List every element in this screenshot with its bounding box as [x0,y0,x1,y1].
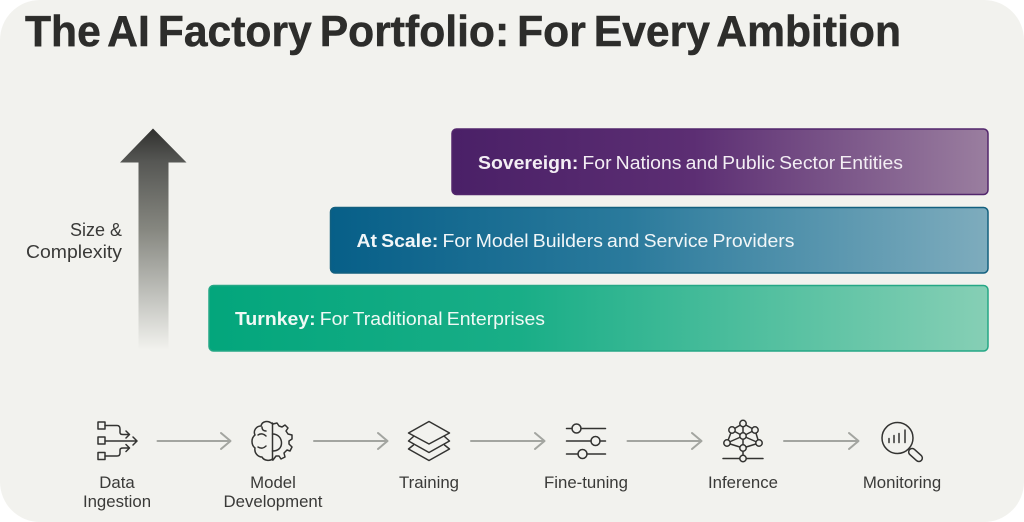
step label: model development [224,473,323,511]
axis label: size and complexity: Size & [70,220,122,240]
tier: Sovereign: Sovereign: For Nations and Public Sector Entities [478,152,903,173]
arrow: ingestion to development [158,433,230,449]
step label: inference: Inference [708,473,778,492]
step label: model development: Development [224,492,323,511]
arrow: fine-tuning to inference [628,433,702,449]
tier: At Scale: At Scale: For Model Builders and Service Providers [356,230,794,251]
tier: At Scale [330,208,988,273]
step label: fine-tuning: Fine-tuning [544,473,628,492]
arrow: training to fine-tuning [471,433,544,449]
step label: data ingestion [83,473,151,511]
icon: model development brain and gear [252,422,292,460]
step label: data ingestion: Data [99,473,135,492]
icon: monitoring magnifier [882,422,924,463]
axis label: size and complexity: Complexity [26,242,122,262]
icon: data ingestion [98,422,137,460]
step label: model development: Model [250,473,296,492]
tier: Sovereign [452,129,988,194]
tier: Turnkey: Turnkey: For Traditional Enterprises [235,308,545,329]
icon: fine-tuning sliders [566,424,606,458]
arrow: size and complexity [120,128,186,350]
arrow: development to training [314,433,388,449]
step label: monitoring: Monitoring [863,473,941,492]
axis label: size and complexity [26,220,122,262]
title: The AI Factory Portfolio: For Every Ambition [25,7,901,56]
step label: data ingestion: Ingestion [83,492,151,511]
icon: training layers [408,422,450,460]
icon: inference network [723,420,763,462]
tier: Turnkey [209,286,988,351]
step label: training: Training [399,473,459,492]
arrow: inference to monitoring [784,433,858,449]
